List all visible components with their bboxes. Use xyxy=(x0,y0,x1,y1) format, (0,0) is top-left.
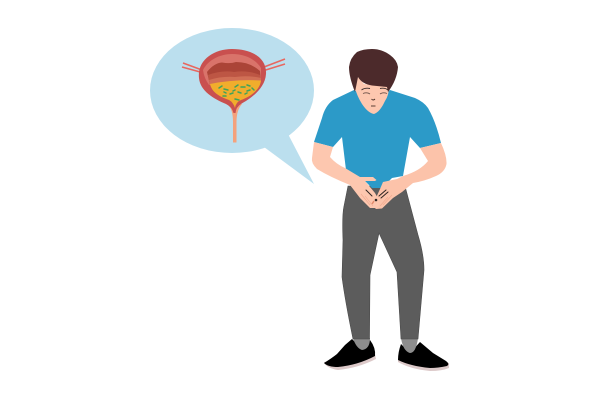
right shoe xyxy=(398,342,449,371)
trousers xyxy=(342,186,424,339)
face xyxy=(355,77,389,114)
bacteria xyxy=(219,85,254,100)
icon: infected bladder xyxy=(182,49,285,142)
eyebrows and eyes xyxy=(362,88,388,94)
urethra xyxy=(228,104,242,142)
speech bubble xyxy=(150,28,314,184)
bladder muscle folds xyxy=(207,62,261,85)
bladder inner lining xyxy=(203,54,261,85)
left shoe xyxy=(324,339,376,370)
nose and mouth xyxy=(371,99,376,106)
ureters xyxy=(182,59,285,72)
bladder wall xyxy=(199,49,266,113)
hair xyxy=(349,49,398,92)
left arm and hand xyxy=(312,142,380,208)
infected urine xyxy=(210,80,261,108)
socks xyxy=(353,338,418,353)
finger lines xyxy=(361,190,392,206)
right arm and hand xyxy=(374,143,447,209)
blue t-shirt xyxy=(314,90,441,188)
man holding his abdomen xyxy=(312,49,449,371)
